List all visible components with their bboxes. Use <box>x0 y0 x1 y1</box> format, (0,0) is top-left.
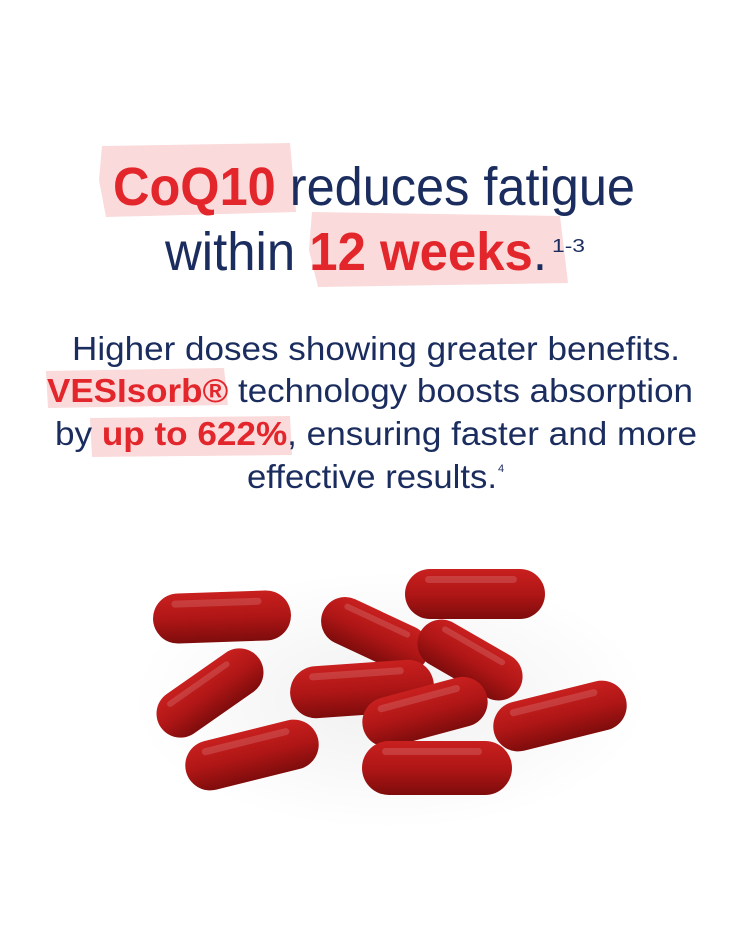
paragraph: Higher doses showing greater benefits. <box>72 330 680 367</box>
title: 1-3 <box>552 236 585 256</box>
paragraph: by up to 622% , ensuring faster and more <box>55 415 697 452</box>
highlight: up to 622% <box>90 416 292 457</box>
paragraph: effective results. <box>247 458 497 495</box>
highlight: 12 weeks <box>309 212 568 287</box>
title <box>113 157 635 282</box>
pills <box>130 569 650 830</box>
highlight: VESIsorb <box>46 368 228 408</box>
paragraph <box>47 330 697 495</box>
title: CoQ10 reduces fatigue <box>113 157 635 217</box>
paragraph: VESIsorb® technology boosts absorption <box>47 372 693 409</box>
paragraph: 4 <box>498 463 504 475</box>
highlight: CoQ10 <box>99 143 296 217</box>
title: within 12 weeks. <box>164 222 547 282</box>
